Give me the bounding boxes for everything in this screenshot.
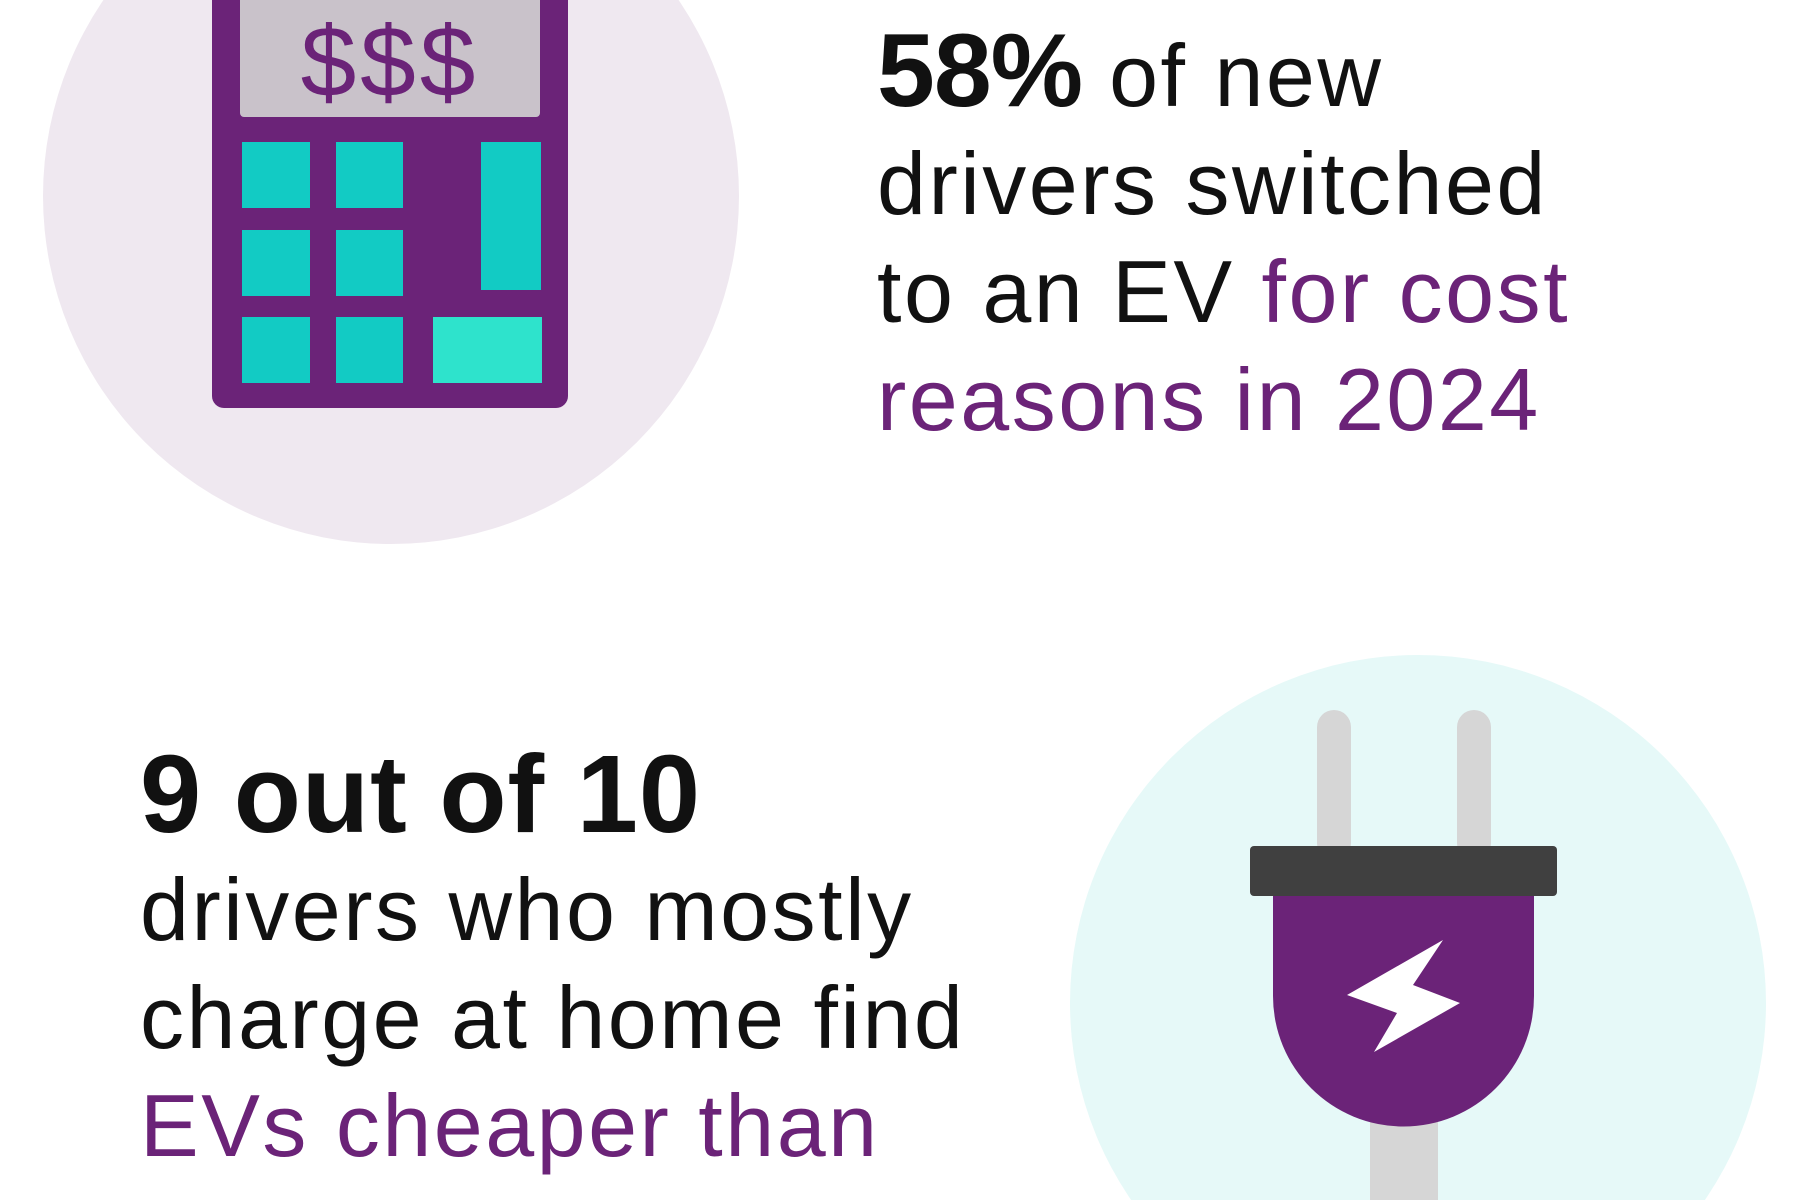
circle: calculator background	[43, 0, 739, 544]
text block: 58% stat: drivers switched	[877, 134, 1548, 233]
text block: 9 out of 10 stat: drivers who mostly	[140, 860, 914, 959]
circle: plug background	[1070, 655, 1766, 1200]
text block: 9 out of 10 stat: 9 out of 10	[140, 733, 701, 856]
text block: 9 out of 10 stat: EVs cheaper than	[140, 1076, 880, 1175]
text block: 58% stat	[877, 13, 1570, 449]
text block: 58% stat: to an EV for cost	[877, 242, 1570, 341]
icon: calculator: $$$	[301, 6, 479, 118]
text block: 58% stat: 58% of new	[877, 13, 1383, 129]
text block: 9 out of 10 stat: charge at home find	[140, 968, 965, 1067]
icon: calculator	[212, 0, 568, 408]
text block: 9 out of 10 stat	[140, 733, 965, 1175]
text block: 58% stat: reasons in 2024	[877, 350, 1541, 449]
